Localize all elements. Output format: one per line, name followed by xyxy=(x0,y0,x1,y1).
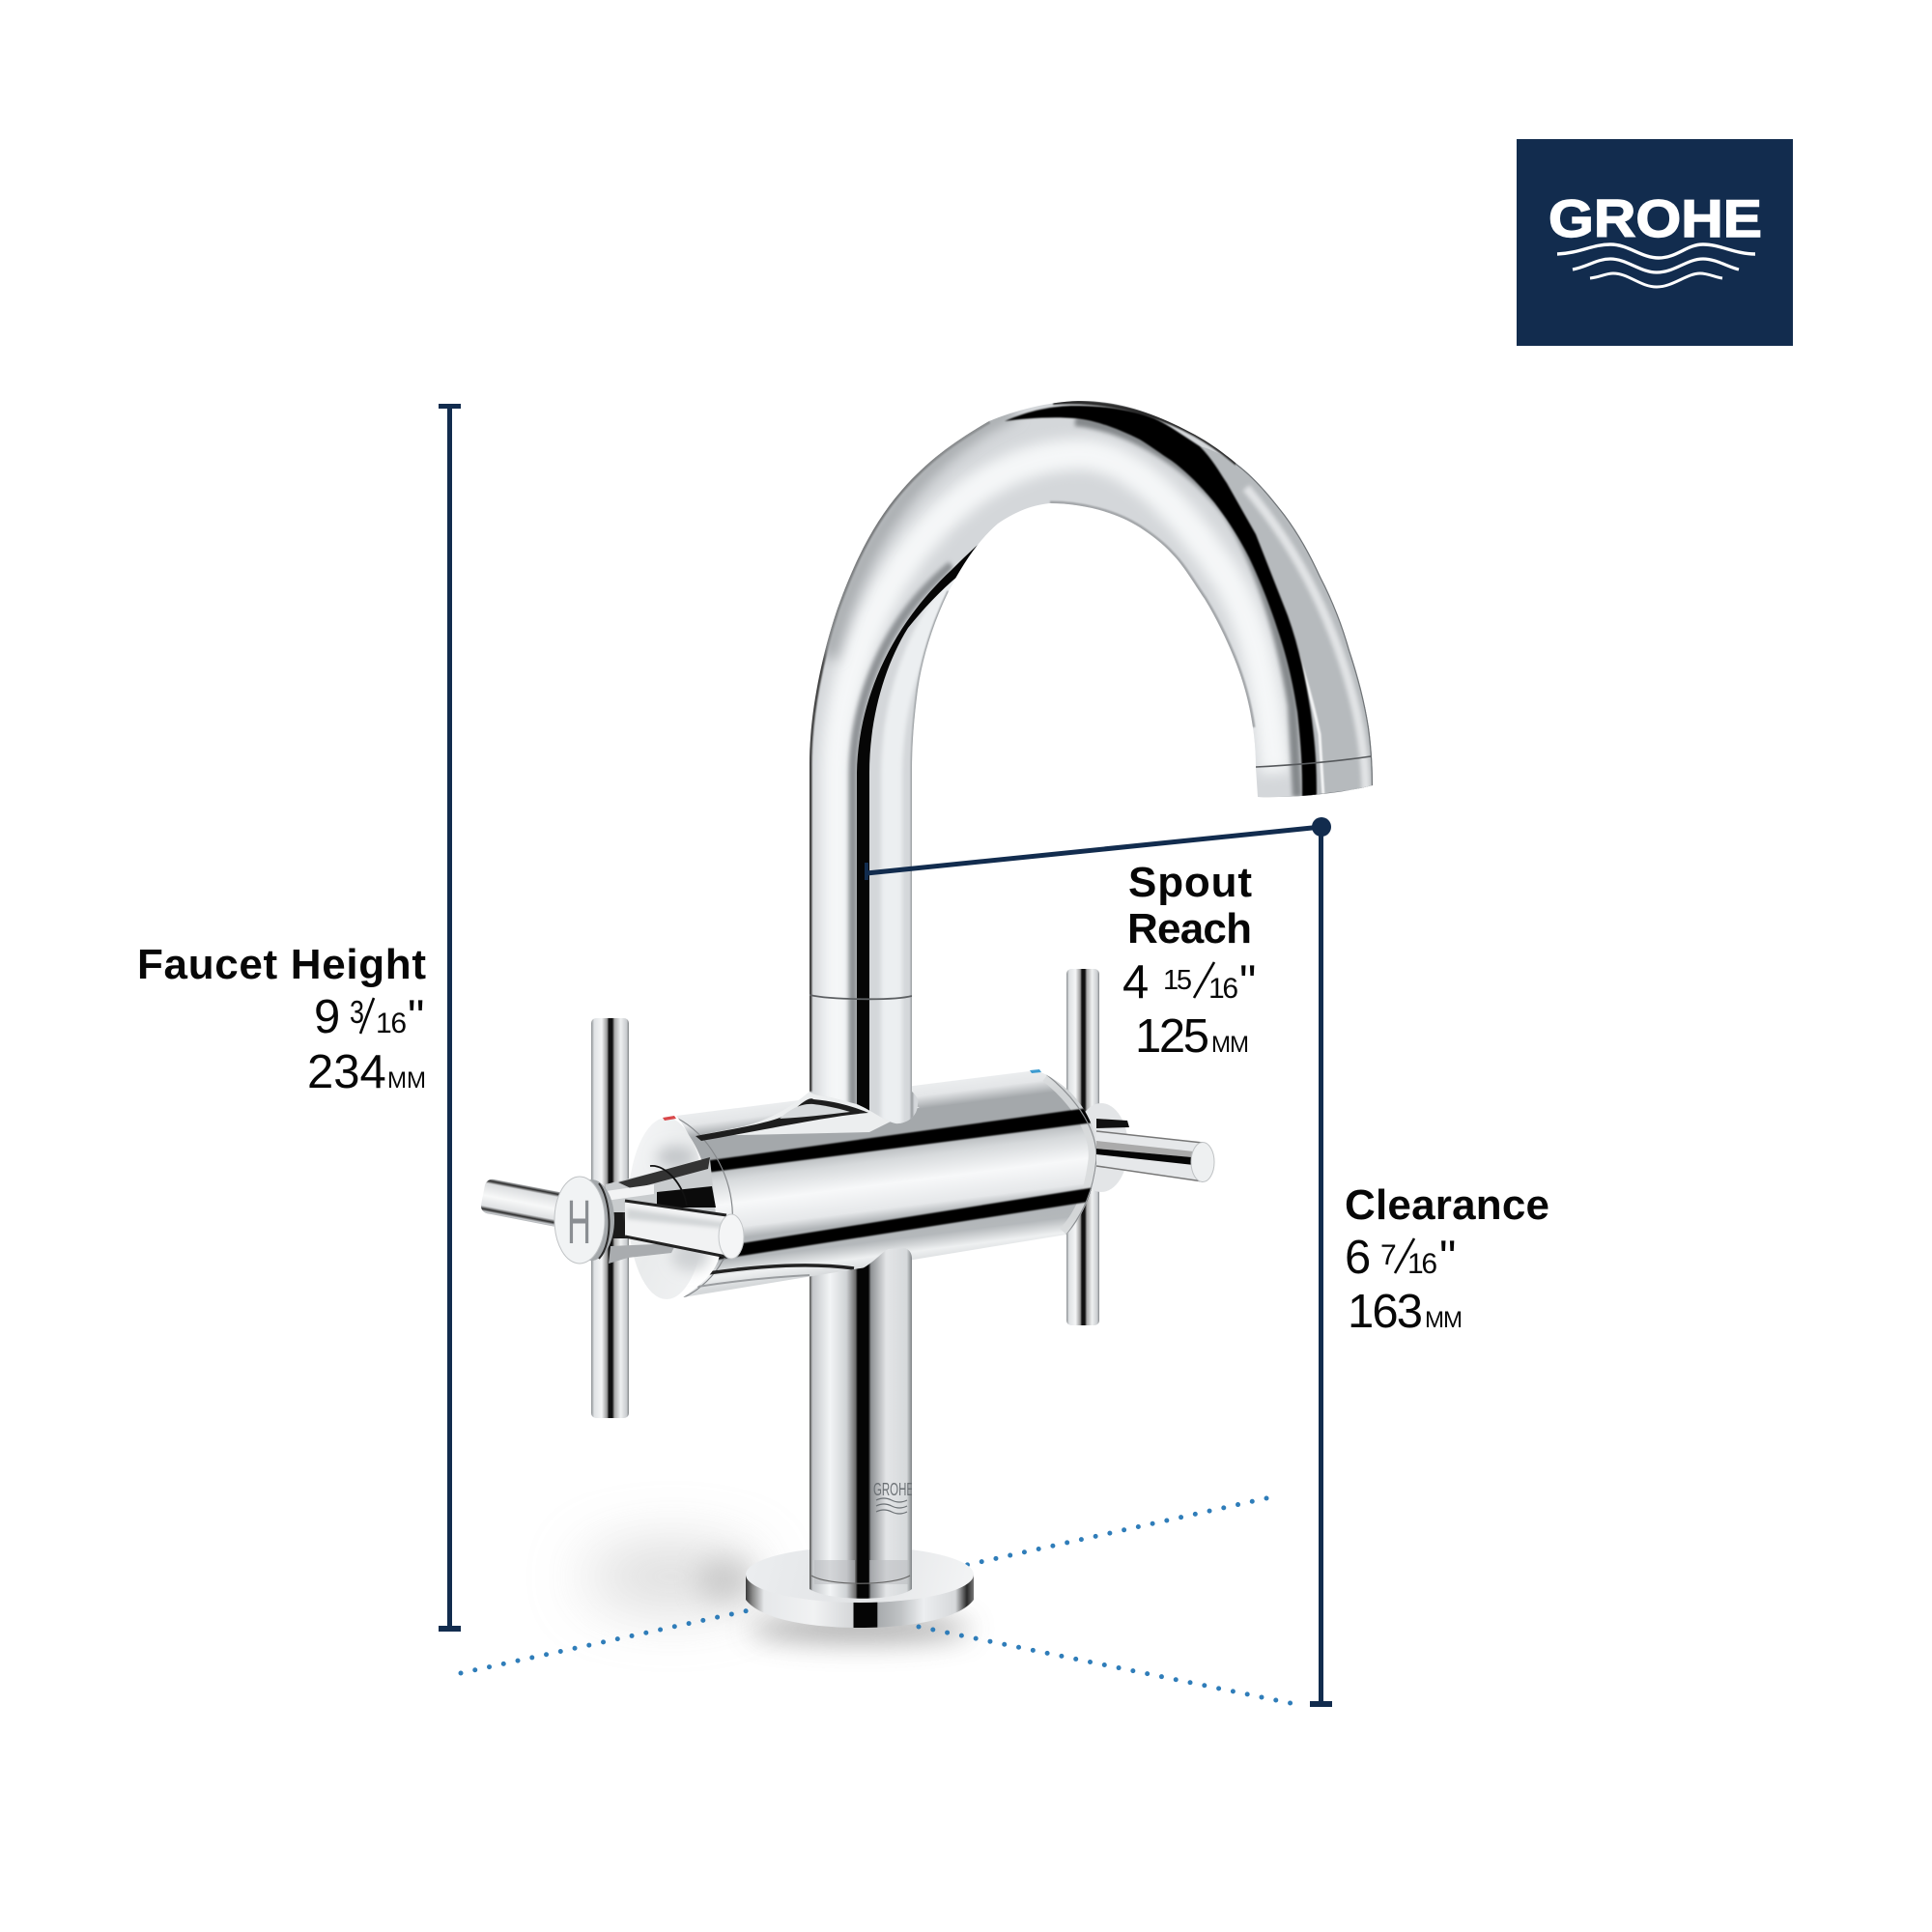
lower black reflection band xyxy=(705,1186,1101,1262)
faucet base disc xyxy=(746,1547,974,1628)
outer reflection zone xyxy=(1200,446,1377,802)
valve body barrel xyxy=(663,1069,1101,1297)
engraved GROHE mark on pipe: GROHE xyxy=(873,1480,914,1499)
left end cap of valve body xyxy=(628,1118,710,1299)
label: faucet height: 3 xyxy=(350,994,364,1030)
dotted floor guide lines xyxy=(461,1498,1304,1706)
right cross handle vertical rod xyxy=(1066,969,1099,1325)
right end cap of valve body xyxy=(1074,1103,1129,1192)
collar seam xyxy=(810,995,912,999)
left cross handle vertical rod xyxy=(591,1018,629,1418)
label: spout reach xyxy=(1122,859,1256,1063)
handle hub with H mark: H xyxy=(567,1187,591,1257)
label: clearance: 7 xyxy=(1380,1239,1397,1271)
outer edge line xyxy=(1236,464,1373,785)
black band along outer curve xyxy=(1005,406,1317,802)
label: spout reach: " xyxy=(1239,956,1256,1009)
hot indicator xyxy=(663,1116,676,1121)
floor shadow xyxy=(584,1548,971,1642)
lower neck flare xyxy=(857,1248,912,1299)
left handle rear spoke xyxy=(480,1178,567,1228)
left handle front spoke xyxy=(625,1201,744,1259)
label: faucet height: MM xyxy=(387,1067,426,1094)
black band along inner curve xyxy=(857,545,978,1111)
label: spout reach: 4 xyxy=(1122,956,1149,1009)
label: spout reach: Reach xyxy=(1127,905,1252,952)
upper black reflection band xyxy=(710,1107,1092,1173)
label: faucet height: 9 xyxy=(314,991,340,1043)
label: faucet height: 16 xyxy=(376,1008,407,1039)
dimension: clearance line xyxy=(1310,827,1332,1707)
label: spout reach: 16 xyxy=(1208,973,1238,1005)
right strip highlight xyxy=(892,570,966,1125)
logo: GROHE xyxy=(1517,139,1793,346)
label: faucet height xyxy=(137,941,426,1098)
label: spout reach: Spout xyxy=(1128,859,1252,906)
label: spout reach: 125 xyxy=(1135,1010,1209,1063)
label: clearance: MM xyxy=(1425,1307,1463,1333)
lower faucet pipe xyxy=(810,1246,914,1599)
label: clearance: 16 xyxy=(1407,1248,1437,1280)
spout tube xyxy=(810,401,1377,1125)
outer edge shading xyxy=(810,421,989,1092)
label: clearance: 6 xyxy=(1345,1232,1371,1284)
label: clearance: 163 xyxy=(1348,1286,1423,1338)
dimension: faucet height line xyxy=(439,404,461,1632)
grey ramp beside black band xyxy=(853,565,952,1125)
grey ramp under the outer band xyxy=(1075,421,1297,797)
label: faucet height: 234 xyxy=(307,1046,386,1098)
right handle front spoke xyxy=(1096,1131,1214,1182)
label: spout reach: MM xyxy=(1211,1032,1249,1058)
label: clearance xyxy=(1345,1181,1549,1338)
top dark rim xyxy=(1053,402,1236,464)
label: clearance: Clearance xyxy=(1345,1181,1549,1229)
left handle stem xyxy=(606,1157,716,1264)
label: spout reach: 15 xyxy=(1163,965,1192,996)
label: faucet height: " xyxy=(408,991,424,1043)
logo: GROHE: GROHE xyxy=(1548,188,1762,248)
label: faucet height: Faucet Height xyxy=(137,941,426,988)
upper neck flare xyxy=(696,1092,920,1141)
spout tip ring line xyxy=(1256,756,1371,767)
dimension: spout reach line xyxy=(865,817,1331,880)
lower flare streaks xyxy=(708,1265,854,1273)
cold indicator xyxy=(1030,1069,1041,1073)
label: clearance: " xyxy=(1439,1232,1456,1284)
handle hub with H mark xyxy=(554,1177,614,1264)
soft highlight on main tube xyxy=(837,454,1275,1121)
